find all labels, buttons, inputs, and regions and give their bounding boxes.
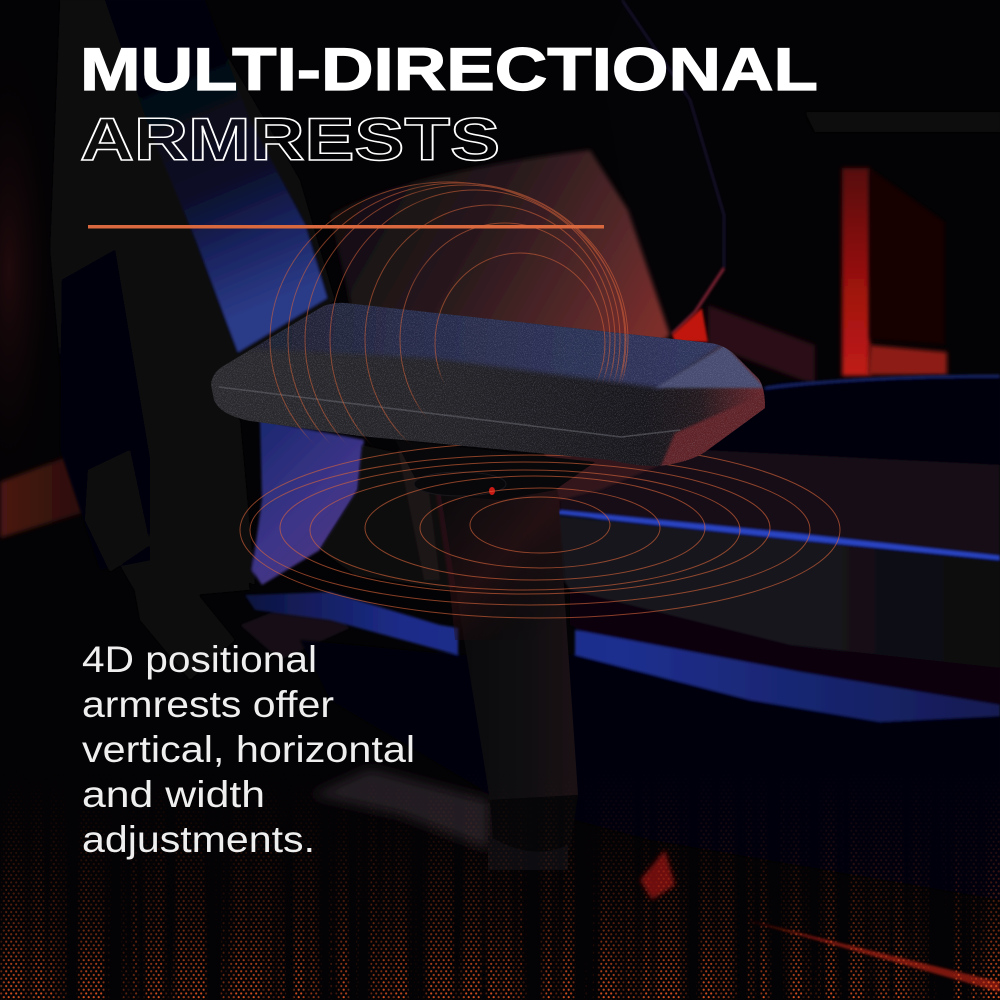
- seat: [245, 376, 1000, 900]
- under-arm cushion side: [320, 440, 660, 590]
- armrest post: [395, 440, 595, 870]
- side frame: [60, 250, 150, 570]
- seat blue band left: [245, 592, 458, 655]
- red streak: [746, 920, 1000, 992]
- red caster glow: [640, 850, 675, 900]
- blue side panel lower: [252, 420, 364, 585]
- blue side panel: [105, 0, 327, 352]
- seat blue band right: [575, 630, 1000, 722]
- seat front fabric: [300, 640, 1000, 900]
- ridge highlight: [219, 387, 680, 437]
- corner bevel: [655, 345, 765, 388]
- lower ripple lines: [240, 442, 840, 618]
- black side fabric: [135, 235, 255, 585]
- front fabric band: [310, 768, 490, 850]
- title line 2 outlined: ARMRESTS: [80, 106, 500, 173]
- headrest wing: [600, 0, 725, 342]
- orange divider: [88, 225, 604, 228]
- body text: vertical, horizontal: [82, 729, 415, 770]
- title line 1: MULTI-DIRECTIONAL: [80, 36, 818, 103]
- lumbar cushion: [330, 150, 670, 360]
- armrest pad: [200, 295, 770, 470]
- chair backrest: [50, 0, 364, 680]
- red corner face: [660, 393, 770, 468]
- body text: and width: [82, 774, 265, 815]
- body text: adjustments.: [82, 819, 315, 860]
- top surface: [245, 298, 730, 388]
- body text: 4D positional: [82, 639, 317, 680]
- body text: armrests offer: [82, 684, 334, 725]
- halftone equalizer dots: [0, 770, 1000, 1000]
- upper ripple lines: [270, 182, 628, 444]
